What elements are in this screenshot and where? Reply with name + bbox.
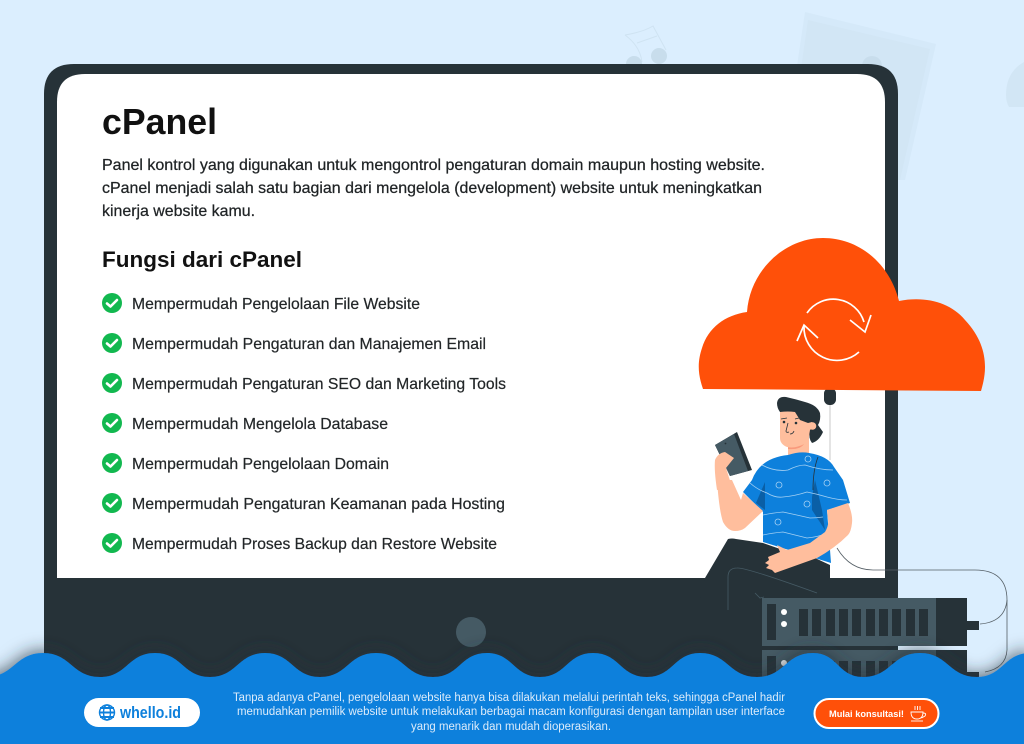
cloud plug xyxy=(824,388,836,405)
globe icon xyxy=(99,705,115,720)
right arm and hand xyxy=(765,503,852,573)
item 6: Mempermudah Pengaturan Keamanan pada Hosting xyxy=(132,496,505,513)
description text: kinerja website kamu. xyxy=(102,203,255,220)
footer text: yang menarik dan mudah dioperasikan. xyxy=(411,721,611,733)
button label: Mulai konsultasi! xyxy=(829,709,904,720)
description text: cPanel menjadi salah satu bagian dari mengelola (development) website untuk meningkatkan xyxy=(102,180,762,197)
monitor power button xyxy=(456,617,486,647)
chin shadow xyxy=(788,444,804,449)
description text: Panel kontrol yang digunakan untuk mengontrol pengaturan domain maupun hosting website. xyxy=(102,157,765,174)
item 3: Mempermudah Pengaturan SEO dan Marketing Tools xyxy=(132,376,506,393)
monitor frame xyxy=(44,64,898,700)
section heading: Fungsi dari cPanel xyxy=(102,247,302,272)
cable from cloud to server xyxy=(830,404,1007,672)
item 2: Mempermudah Pengaturan dan Manajemen Email xyxy=(132,336,486,353)
cloud icon xyxy=(699,238,985,391)
footer wave xyxy=(0,653,1024,744)
server stack xyxy=(762,598,979,690)
logo text: whello.id xyxy=(119,703,181,722)
ear xyxy=(809,422,816,430)
left arm xyxy=(717,480,763,531)
coffee cup icon xyxy=(911,706,926,721)
item 4: Mempermudah Mengelola Database xyxy=(132,416,388,433)
shirt xyxy=(743,452,850,563)
hair xyxy=(777,397,823,443)
hand holding tablet xyxy=(715,452,734,490)
background decor: blob xyxy=(1006,62,1024,107)
logo pill xyxy=(84,698,200,727)
background decor: tilted square xyxy=(780,12,936,180)
title: cPanel xyxy=(102,101,217,142)
footer text xyxy=(233,692,785,733)
monitor screen xyxy=(57,74,885,578)
shirt pattern xyxy=(750,456,847,538)
item 1: Mempermudah Pengelolaan File Website xyxy=(132,296,420,313)
sync arrows xyxy=(797,299,871,360)
footer text: memudahkan pemilik website untuk melakukan berbagai macam konfigurasi dengan tampilan user interface xyxy=(237,706,785,718)
face xyxy=(780,409,813,448)
item 7: Mempermudah Proses Backup dan Restore Website xyxy=(132,536,497,553)
leg outline xyxy=(728,568,817,610)
face details xyxy=(781,418,799,434)
consult button xyxy=(814,699,938,728)
server 2 xyxy=(762,650,979,690)
shirt shading xyxy=(756,480,825,530)
legs xyxy=(700,538,830,600)
description text xyxy=(102,157,765,220)
tablet xyxy=(715,432,752,476)
shirt seam xyxy=(813,457,818,490)
footer text: Tanpa adanya cPanel, pengelolaan website hanya bisa dilakukan melalui perintah teks, sehingga cPanel hadir xyxy=(233,692,785,704)
person illustration xyxy=(700,397,852,610)
background decor: music note xyxy=(625,26,667,72)
neck xyxy=(788,436,809,458)
item 5: Mempermudah Pengelolaan Domain xyxy=(132,456,389,473)
checklist xyxy=(102,293,506,553)
server 1 xyxy=(762,598,979,646)
